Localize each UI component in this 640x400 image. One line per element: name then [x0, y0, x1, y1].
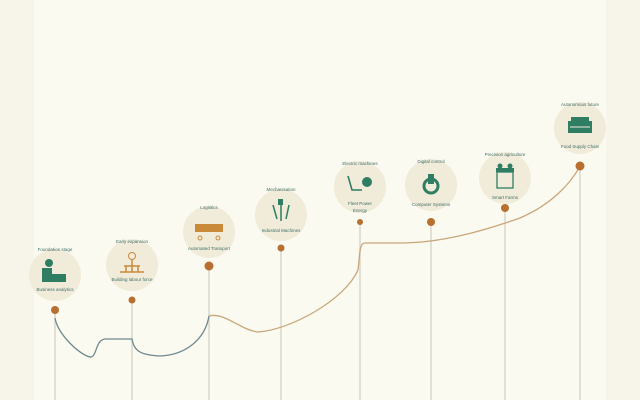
trend line	[55, 166, 580, 357]
milestone 7: Smart Farms	[492, 195, 519, 200]
milestone 3: Automated Transport	[188, 246, 231, 251]
milestone 7: Precision agriculture	[485, 152, 526, 157]
milestone 6: Computer Systems	[412, 202, 451, 207]
milestone 3: Logistics	[200, 205, 218, 210]
milestone 1: Business analytics	[36, 287, 74, 292]
milestone 8	[554, 102, 606, 170]
milestone 6	[405, 159, 457, 226]
milestone 2: Early expansion	[116, 239, 149, 244]
stem lines	[55, 166, 580, 400]
milestone 8: Autonomous future	[561, 102, 600, 107]
milestone 1: Foundation stage	[38, 247, 73, 252]
milestone 6: Digital control	[417, 159, 445, 164]
milestone 5: Fleet Power	[348, 201, 373, 206]
milestone 2	[106, 239, 158, 304]
milestone 4: Industrial Machines	[262, 228, 301, 233]
milestone 1	[29, 247, 81, 314]
milestone 4	[255, 187, 307, 252]
milestone 8: Food Supply Chain	[561, 144, 600, 149]
milestone 5: Electric machines	[342, 161, 378, 166]
milestone 5: Energy	[353, 208, 368, 213]
milestone 2: Building labour force	[111, 277, 153, 282]
milestone 7	[479, 152, 531, 212]
milestone 4: Mechanisation	[266, 187, 296, 192]
milestone 5	[334, 161, 386, 225]
milestone 3	[183, 205, 235, 270]
